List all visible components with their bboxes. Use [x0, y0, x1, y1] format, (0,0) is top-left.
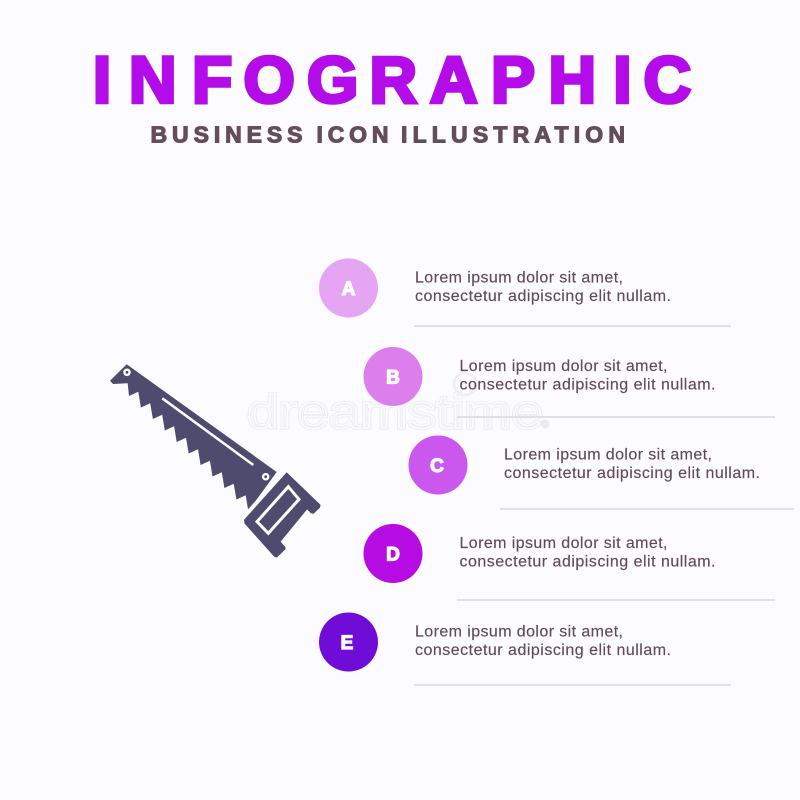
step A: [319, 258, 731, 326]
step A: Lorem ipsum dolor sit amet,: [415, 270, 623, 286]
step E: Lorem ipsum dolor sit amet,: [415, 624, 623, 640]
step C: [408, 436, 794, 509]
rivet holes: [124, 370, 130, 375]
saw handle: [244, 473, 320, 557]
step A: consectetur adipiscing elit nullam.: [415, 288, 671, 305]
watermark: dreamstime: [247, 385, 543, 438]
step B: B: [386, 368, 400, 388]
step E: E: [341, 633, 353, 654]
step D: Lorem ipsum dolor sit amet,: [460, 535, 668, 552]
icon: hand saw: [110, 364, 320, 557]
step C: C: [430, 456, 444, 477]
saw blade: [110, 364, 277, 511]
step A: A: [342, 279, 356, 300]
step D: D: [386, 544, 400, 566]
subtitle: [150, 122, 625, 148]
step D: [364, 524, 775, 600]
step B: Lorem ipsum dolor sit amet,: [460, 358, 668, 375]
handle grip outline: [257, 487, 299, 533]
subtitle: ICON: [316, 122, 388, 148]
step E: consectetur adipiscing elit nullam.: [415, 642, 671, 659]
step B: consectetur adipiscing elit nullam.: [460, 376, 716, 394]
title: INFOGRAPHIC: [93, 43, 691, 117]
white separator and blade slot: [162, 398, 278, 513]
watermark: [247, 373, 550, 438]
watermark: dreamstime: [247, 385, 543, 438]
step C: consectetur adipiscing elit nullam.: [504, 465, 760, 482]
subtitle: BUSINESS: [150, 122, 302, 148]
subtitle: ILLUSTRATION: [401, 122, 625, 148]
step B: [364, 347, 775, 417]
step E: [319, 612, 731, 685]
step C: Lorem ipsum dolor sit amet,: [504, 446, 712, 464]
step D: consectetur adipiscing elit nullam.: [460, 554, 716, 570]
